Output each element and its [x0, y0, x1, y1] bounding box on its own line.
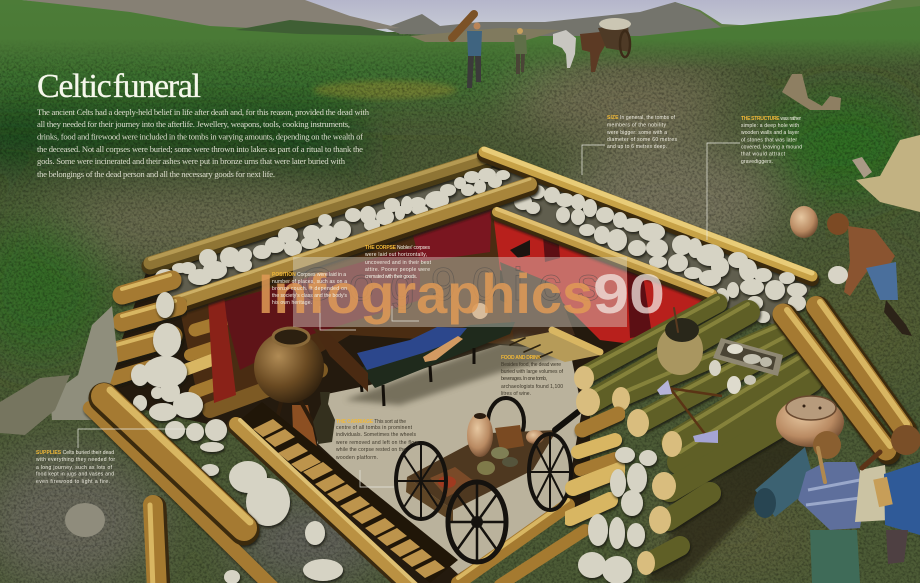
label: wine: beverages. In one tomb,	[501, 376, 547, 382]
label: the corpse: uncovered and in their best	[365, 260, 432, 266]
stone tray	[709, 338, 783, 394]
figure: man laying stone	[827, 213, 912, 336]
figure: man carrying log	[452, 14, 482, 88]
watermark ghost outline text: Cog90ics	[300, 258, 600, 310]
label: the structure	[741, 116, 802, 165]
label: wine: buried with large volumes of	[501, 369, 564, 375]
label: the corpse: attire. Poorer people were	[365, 267, 430, 273]
label: the structure: that would attract	[741, 152, 786, 158]
label: supplies: SUPPLIES Celts buried their dead	[36, 450, 114, 456]
intro text: the belongings of the dead person and all the necessary goods for next life.	[37, 169, 275, 179]
label: position: the society's class and the body's	[272, 293, 348, 299]
label: size: and up to 6 metres deep.	[607, 144, 667, 150]
clay pot on ground	[790, 206, 818, 238]
figure: woman with shawl	[798, 431, 866, 583]
label: the corpse	[365, 245, 432, 280]
grey rock left	[0, 306, 118, 435]
label: position: bronze couch. It depended on	[272, 286, 347, 292]
label: supplies: even firewood to light a fire.	[36, 479, 110, 485]
sky and distant mountains	[0, 0, 920, 70]
right wall green logs	[585, 298, 810, 562]
label: the carriage: wooden platform.	[336, 455, 378, 461]
figure: man with scroll	[862, 425, 920, 564]
label: the structure: THE STRUCTURE was rather	[741, 116, 801, 122]
intro text: gods. Some were incinerated and their ashes were put in bronze urns that were later buried with	[37, 156, 346, 166]
dark jug	[313, 392, 335, 444]
label: the carriage: while the corpse rested on the	[336, 447, 406, 453]
label: position: his own heritage.	[272, 300, 312, 306]
lying corpse	[357, 303, 488, 370]
left log ends stack	[92, 275, 178, 385]
stone bed right	[495, 170, 812, 330]
funeral couch	[313, 322, 515, 406]
front wall log ends	[570, 414, 620, 518]
inner left log	[174, 179, 530, 306]
floor shadows	[345, 335, 590, 405]
label: supplies	[36, 450, 115, 485]
label: the corpse: THE CORPSE Nobles' corpses	[365, 245, 430, 251]
roof stones left	[155, 168, 510, 285]
label: the corpse: were laid out horizontally,	[365, 252, 427, 258]
label: size: were bigger: some with a	[607, 130, 667, 136]
back wall dark timber	[180, 205, 590, 410]
roof stones right	[514, 185, 807, 323]
pit floor	[317, 345, 582, 574]
intro text: all they needed for their journey into the afterlife. Jewellery, weapons, tools, cooking instruments,	[37, 119, 350, 129]
intro text: The ancient Celts had a deeply-held belief in life after death and, for this reason, provided the dead with	[37, 107, 370, 117]
label: size: diameter of some 60 metres	[607, 137, 678, 143]
label: the structure: gravediggers.	[741, 159, 773, 165]
intro text: drinks, food and firewood were included in the tombs in varying amounts, depending on the wealth of	[37, 132, 363, 142]
back wall logs	[185, 322, 320, 410]
tomb pit shadow	[100, 155, 815, 583]
label: size: SIZE In general, the tombs of	[607, 115, 676, 121]
leader lines	[78, 143, 740, 487]
rolled blue blanket	[754, 447, 815, 518]
front plank strip	[240, 402, 458, 583]
bronze vase on stand	[254, 328, 324, 456]
carriage	[396, 398, 578, 562]
watermark wordmark: Infographics	[258, 262, 593, 325]
label: wine: archaeologists found 1,100	[501, 384, 563, 390]
title: Celtic funeral	[37, 68, 201, 105]
ground rock lower left	[65, 503, 105, 537]
inner right log	[497, 209, 712, 296]
label: the structure: of stones that was later	[741, 138, 797, 144]
label: supplies: food kept in jugs and vases and	[36, 472, 114, 478]
front column stones	[578, 447, 657, 583]
stone bed left	[155, 165, 530, 300]
right red wall hangings	[492, 205, 708, 345]
label: size: members of the nobility	[607, 122, 666, 128]
big front left log	[90, 390, 275, 583]
label: the corpse: cremated with their goods.	[365, 274, 417, 280]
figure: second walker	[514, 28, 527, 74]
label: the carriage: centre of all tombs in prominent	[336, 425, 413, 431]
label: the carriage	[336, 419, 419, 461]
basket	[657, 308, 703, 375]
bottom wall logs	[458, 500, 585, 583]
intro text: the deceased. Not all corpses were buried; some were thrown into lakes as part of a ritual to thank the	[37, 144, 363, 154]
label: position: number of places, such as on a	[272, 279, 347, 285]
label: wine: litres of wine.	[501, 391, 531, 397]
boulders in the field	[782, 74, 920, 212]
label: supplies: with everything they needed for	[36, 457, 115, 463]
large clay pot	[776, 396, 844, 447]
shadow under right log wall	[645, 395, 840, 583]
left curtains	[208, 198, 492, 403]
ox cart	[553, 18, 631, 72]
label: the structure: covered, leaving a mound	[741, 144, 802, 150]
front left inner log	[236, 420, 418, 583]
label: position	[272, 272, 348, 306]
loose white stones on ground	[224, 461, 343, 583]
outer back log	[150, 153, 486, 266]
watermark panel	[293, 257, 627, 327]
label: size	[607, 115, 678, 150]
label: the carriage: were removed and left on the floor	[336, 440, 419, 446]
cream sack	[855, 465, 890, 522]
left side stones	[131, 292, 227, 476]
label: wine: Besides food, the dead were	[501, 362, 561, 368]
label: the structure: wooden walls and a layer	[741, 130, 799, 136]
log cut ends	[574, 366, 682, 575]
label: supplies: a long journey, such as lots of	[36, 465, 113, 471]
big leaning logs	[783, 302, 907, 452]
outer right log	[484, 149, 812, 279]
watermark number: 90	[593, 262, 665, 325]
label: position: POSITION Corpses were laid in a	[272, 272, 346, 278]
label: the structure: simple: a deep hole with	[741, 123, 799, 129]
axes	[657, 380, 722, 443]
lower left short log	[150, 505, 159, 583]
label: the carriage: individuals. Sometimes the wheels	[336, 432, 416, 438]
label: wine	[501, 355, 564, 397]
intro text	[37, 107, 370, 179]
label: the carriage: THE CARRIAGE This sort at the	[336, 419, 406, 425]
right inner planks	[510, 330, 600, 362]
label: wine: FOOD AND DRINK	[501, 355, 541, 361]
